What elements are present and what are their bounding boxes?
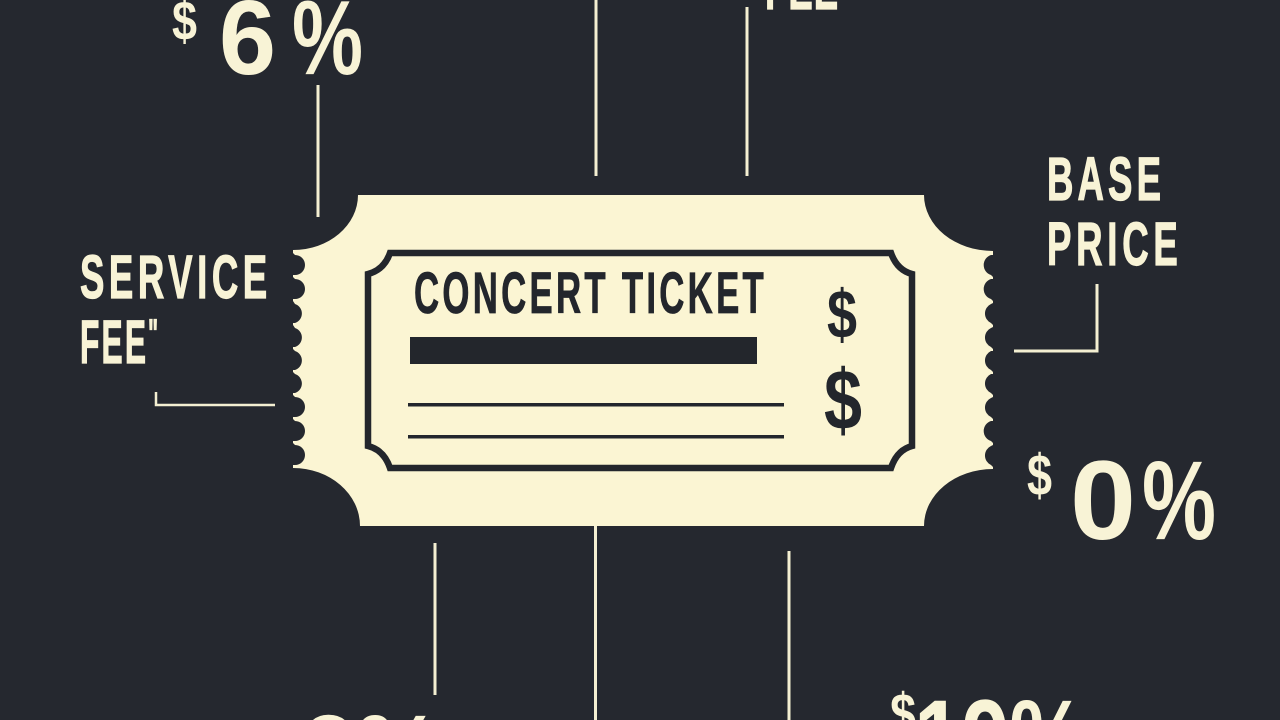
ticket body <box>293 195 993 526</box>
connector: bottom left <box>434 543 436 695</box>
value: 0 percent: % <box>1142 438 1216 563</box>
label: service fee: SERVICE <box>80 242 267 311</box>
label: base price: PRICE <box>1047 209 1178 278</box>
value: 0 percent: 0 <box>1070 438 1136 563</box>
label: service fee: " <box>148 311 158 356</box>
label: base price <box>1047 144 1178 278</box>
ticket solid bar <box>410 337 757 364</box>
label: service fee: FEE <box>80 309 146 377</box>
connector: top center <box>594 0 598 176</box>
label: service fee <box>80 242 267 377</box>
ticket title: CONCERT TICKET <box>414 262 764 326</box>
large dollar icon: $ <box>824 353 862 448</box>
connector: top right <box>746 7 748 176</box>
ticket line 2 <box>408 435 784 438</box>
ticket inner frame <box>368 253 912 468</box>
connector: service fee <box>156 392 275 405</box>
value: 0 percent: $ <box>1027 443 1052 508</box>
small dollar icon: $ <box>827 276 857 353</box>
value: 6 percent <box>172 0 363 97</box>
connector: base price <box>1014 284 1097 351</box>
ticket line 1 <box>408 403 784 406</box>
connector: bottom center <box>594 526 597 720</box>
connector: bottom right <box>788 551 790 720</box>
value: 0 percent <box>1027 438 1216 563</box>
label: base price: BASE <box>1047 144 1161 213</box>
value: bottom right percent <box>890 677 1086 720</box>
connector: top left <box>316 85 320 217</box>
ticket <box>293 195 993 526</box>
